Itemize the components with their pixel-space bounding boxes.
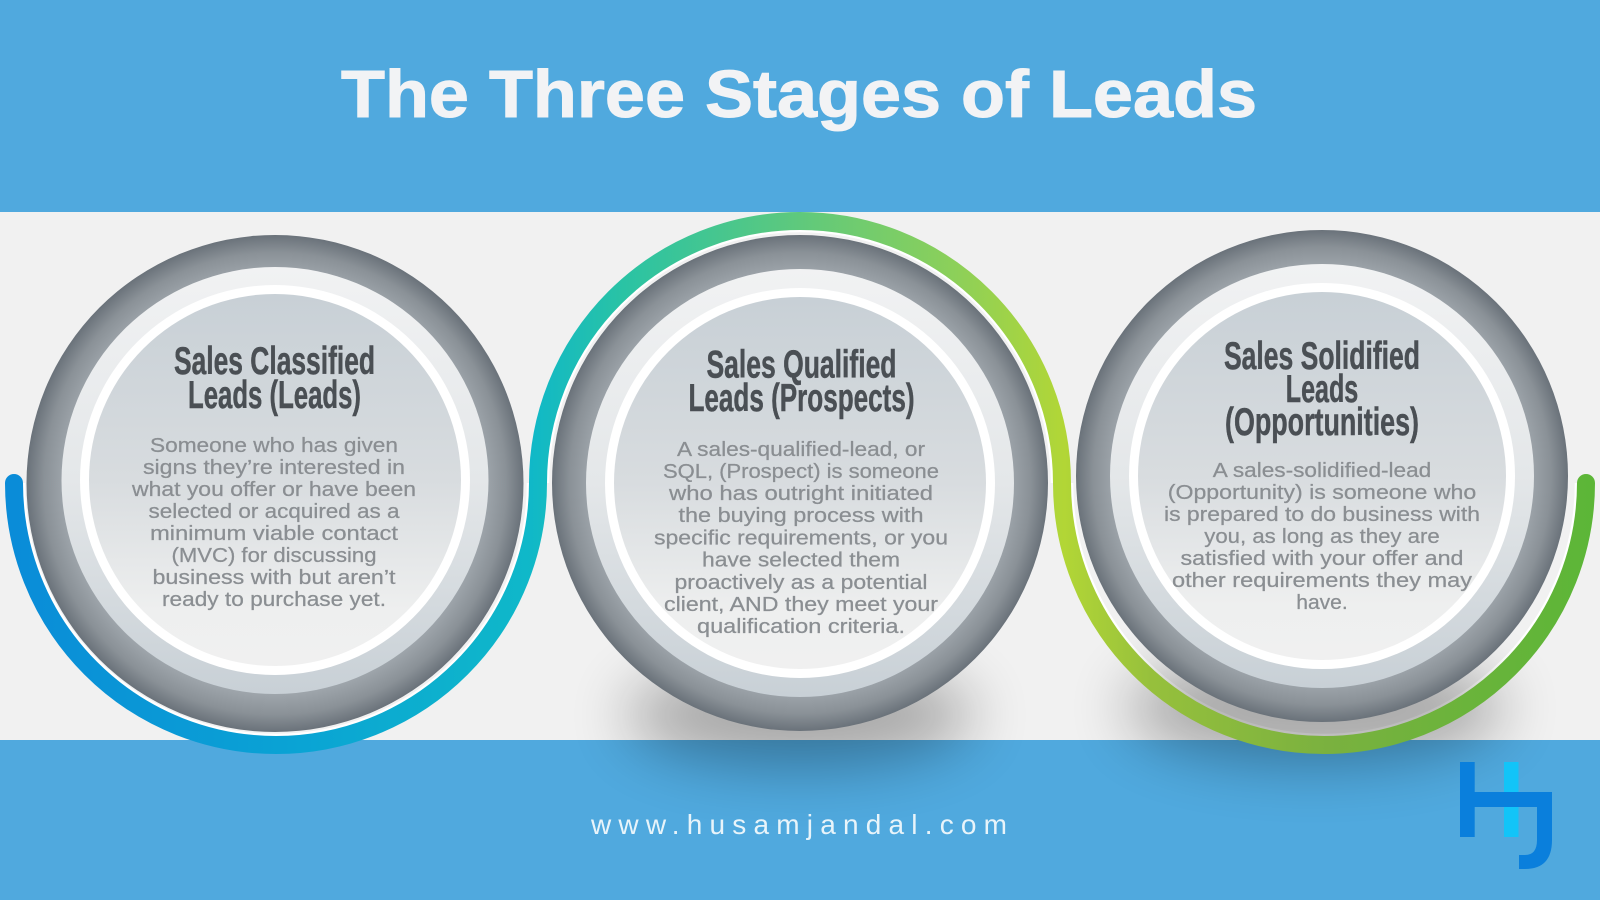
body text 1: ready to purchase yet. bbox=[162, 589, 386, 611]
title: The Three Stages of Leads bbox=[341, 57, 1257, 132]
gradient ribbon arrow connecting the three circles bbox=[14, 221, 1586, 745]
body text 2: client, AND they meet your bbox=[664, 594, 938, 616]
heading 3 bbox=[1224, 335, 1420, 444]
body text 3 bbox=[1164, 460, 1480, 614]
body text 2: have selected them bbox=[702, 550, 900, 572]
heading 1: Sales Classified bbox=[174, 340, 375, 383]
circle graphic 3 bbox=[1076, 230, 1568, 722]
heading 3: (Opportunities) bbox=[1225, 401, 1419, 444]
body text 3: satisfied with your offer and bbox=[1180, 548, 1464, 570]
body text 3: you, as long as they are bbox=[1204, 526, 1440, 548]
heading 1 bbox=[174, 340, 375, 417]
body text 1: what you offer or have been bbox=[131, 479, 416, 501]
body text 3: have. bbox=[1296, 592, 1348, 614]
footer band bbox=[0, 740, 1600, 900]
footer website url: www.husamjandal.com bbox=[590, 809, 1007, 840]
body text 1: business with but aren’t bbox=[152, 567, 396, 589]
icon: HJ logo bbox=[1460, 762, 1552, 869]
heading 2: Sales Qualified bbox=[706, 344, 896, 386]
body text 1: minimum viable contact bbox=[150, 523, 399, 545]
body text 3: other requirements they may bbox=[1172, 570, 1472, 592]
circle graphic 1 bbox=[26, 235, 524, 732]
header band bbox=[0, 0, 1600, 212]
body text 3: A sales-solidified-lead bbox=[1213, 460, 1431, 482]
heading 2: Leads (Prospects) bbox=[688, 377, 914, 420]
body text 3: is prepared to do business with bbox=[1164, 504, 1480, 526]
body text 2: A sales-qualified-lead, or bbox=[677, 439, 925, 461]
body text 2 bbox=[654, 439, 948, 638]
body text 2: SQL, (Prospect) is someone bbox=[663, 461, 939, 483]
body text 1: Someone who has given bbox=[150, 435, 398, 457]
body text 1: selected or acquired as a bbox=[148, 501, 400, 523]
drop shadow: middle circle bbox=[625, 663, 975, 767]
body text 1 bbox=[131, 435, 416, 611]
heading 3: Sales Solidified bbox=[1224, 335, 1420, 378]
body text 1: signs they’re interested in bbox=[143, 457, 405, 479]
panel: sales solidified leads bbox=[1076, 230, 1568, 722]
body text 2: who has outright initiated bbox=[668, 483, 933, 505]
circle graphic 2 bbox=[552, 235, 1048, 731]
body text 2: specific requirements, or you bbox=[654, 528, 948, 550]
body text 2: proactively as a potential bbox=[674, 572, 928, 594]
panel: sales qualified leads bbox=[552, 235, 1048, 731]
heading 2 bbox=[688, 344, 914, 420]
white inner edge of ribbon bbox=[24, 231, 1576, 735]
heading 3: Leads bbox=[1286, 368, 1358, 411]
drop shadow: right circle bbox=[1125, 653, 1505, 763]
panel: sales classified leads bbox=[26, 235, 524, 732]
body text 2: qualification criteria. bbox=[697, 616, 905, 638]
background panel bbox=[0, 212, 1600, 740]
body text 2: the buying process with bbox=[678, 505, 924, 527]
body text 3: (Opportunity) is someone who bbox=[1168, 482, 1476, 504]
heading 1: Leads (Leads) bbox=[188, 374, 361, 417]
body text 1: (MVC) for discussing bbox=[172, 545, 376, 567]
